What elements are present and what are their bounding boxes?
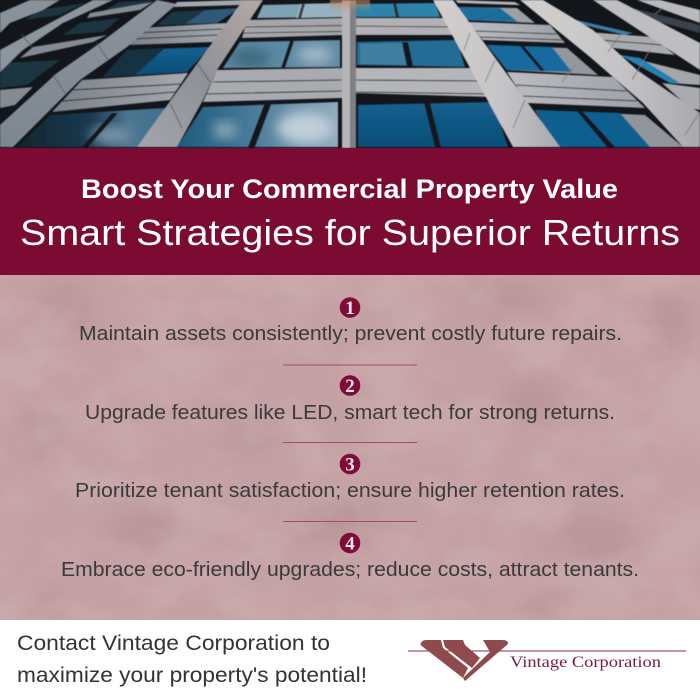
number badge 3 xyxy=(340,454,360,476)
number badge 2: 2 xyxy=(345,376,355,397)
photo: building facade xyxy=(0,0,700,148)
number badge 1 xyxy=(340,297,360,319)
spandrel panels: left xyxy=(0,0,343,112)
title banner xyxy=(0,148,700,275)
window band: centre-right glazing xyxy=(355,3,508,147)
centre mullion xyxy=(330,0,370,148)
call to action: maximize your property's potential! xyxy=(17,664,367,687)
window band: left glazing xyxy=(0,0,240,147)
number badge 2 xyxy=(340,375,360,397)
logo: Vintage Corporation: Vintage Corporation xyxy=(510,654,661,671)
step 2 xyxy=(85,375,615,424)
diagonal columns: left xyxy=(0,0,263,147)
spandrel panels: right xyxy=(353,0,700,110)
window band: centre-left glazing xyxy=(177,3,343,147)
number badge 4: 4 xyxy=(345,534,355,554)
step 3 text: Prioritize tenant satisfaction; ensure higher retention rates. xyxy=(75,480,625,502)
subtitle: Smart Strategies for Superior Returns xyxy=(20,212,680,253)
number badge 3: 3 xyxy=(345,454,355,476)
step 4 xyxy=(61,533,639,581)
panel: strategies background xyxy=(0,275,700,620)
step 1 xyxy=(79,297,622,345)
logo: Vintage Corporation xyxy=(408,640,686,681)
title: Boost Your Commercial Property Value xyxy=(81,174,618,204)
step 2 text: Upgrade features like LED, smart tech for strong returns. xyxy=(85,402,615,424)
diagonal columns: right xyxy=(433,0,700,147)
call to action: Contact Vintage Corporation to xyxy=(17,632,330,655)
step 3 xyxy=(75,454,625,502)
call to action xyxy=(17,632,367,687)
number badge 4 xyxy=(340,533,360,554)
footer xyxy=(0,620,700,700)
step 4 text: Embrace eco-friendly upgrades; reduce costs, attract tenants. xyxy=(61,559,639,581)
window band: right glazing xyxy=(457,5,700,147)
step 1 text: Maintain assets consistently; prevent costly future repairs. xyxy=(79,323,622,345)
number badge 1: 1 xyxy=(345,298,355,319)
